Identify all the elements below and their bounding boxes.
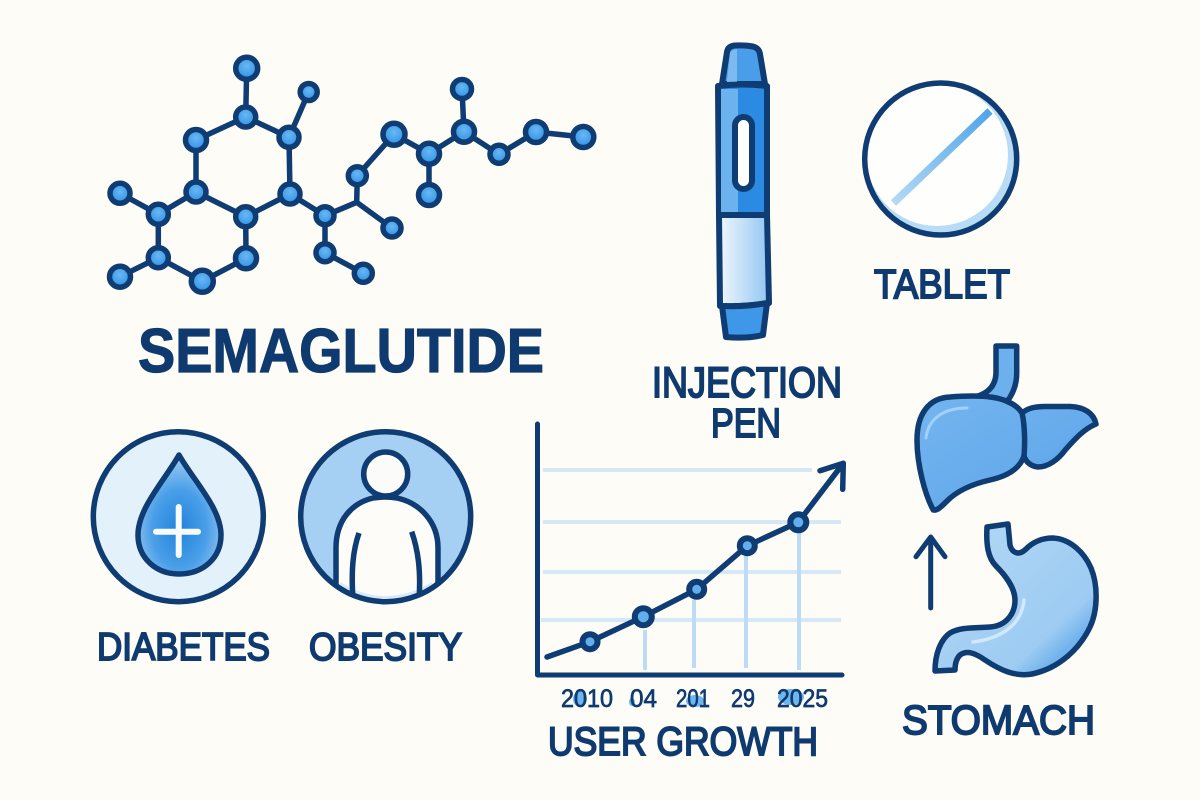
line chart: user growth (538, 424, 843, 713)
year labels (561, 685, 828, 713)
data points (582, 514, 806, 649)
molecule diagram (110, 57, 594, 292)
label: tablet: TABLET (874, 261, 1010, 307)
label: injection pen: INJECTION (652, 359, 842, 407)
label: injection pen: PEN (711, 400, 781, 446)
year labels: 2010 (561, 685, 613, 713)
label: obesity: OBESITY (309, 626, 462, 669)
icon: stomach (935, 524, 1096, 675)
molecule atoms (110, 57, 594, 292)
year labels: 04 (630, 685, 657, 713)
pen top cap (722, 45, 765, 84)
molecule bonds (120, 68, 583, 281)
label: stomach: STOMACH (902, 697, 1095, 743)
tablet score line (894, 111, 990, 203)
infographic canvas (90, 42, 1099, 756)
year labels: 201 (676, 685, 710, 713)
icon: diabetes drop (93, 432, 263, 602)
icon: injection pen (718, 45, 769, 338)
year labels: 29 (731, 685, 755, 713)
label: diabetes: DIABETES (97, 626, 270, 669)
pen upper body (718, 84, 767, 215)
icon: obesity person (301, 432, 471, 610)
title: semaglutide: SEMAGLUTIDE (138, 317, 544, 386)
pen window (735, 117, 752, 189)
year labels: 2025 (777, 685, 828, 713)
icon: tablet (865, 83, 1017, 235)
person head (364, 452, 408, 496)
icon: liver (917, 346, 1096, 510)
label: user growth: USER GROWTH (548, 720, 818, 764)
growth line with arrow (547, 463, 843, 657)
liver lobes (917, 396, 1096, 510)
liver duct (978, 346, 1017, 402)
person body (336, 497, 438, 610)
label: injection pen (652, 359, 842, 446)
pen lower body (719, 215, 769, 306)
liver highlight (926, 408, 967, 438)
stomach highlight (973, 600, 1024, 642)
tick highlights (573, 689, 804, 707)
pen bottom cap (722, 303, 767, 338)
arrow: stomach to liver (916, 537, 945, 608)
chart axes (538, 424, 842, 675)
plus sign (156, 507, 198, 555)
blood drop (138, 455, 221, 574)
